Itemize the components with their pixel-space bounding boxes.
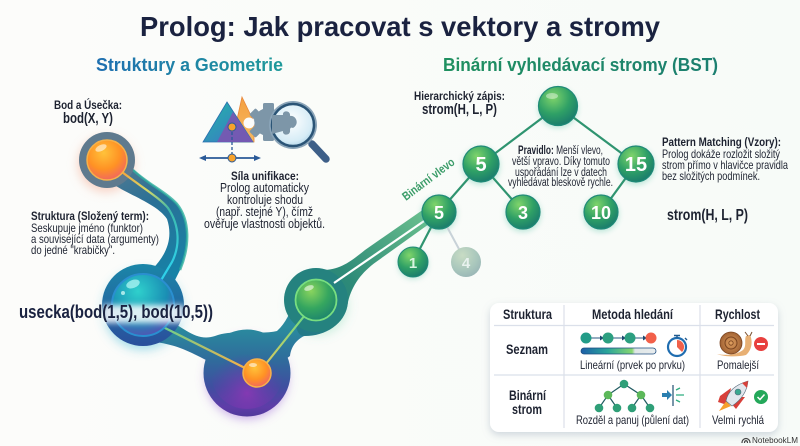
formula: strom(H, L, P): strom(H, L, P) bbox=[667, 207, 748, 224]
icon: green check bbox=[754, 390, 768, 404]
icon: snail bbox=[717, 332, 752, 356]
node: 5: 5 bbox=[475, 154, 487, 176]
node: 3 bbox=[506, 195, 540, 229]
node: 4 faded bbox=[451, 247, 481, 277]
text block: Síla unifikace: Prolog automaticky bbox=[220, 181, 310, 195]
text block: Hierarchický zápis bbox=[414, 89, 505, 118]
band: green arm bbox=[296, 209, 429, 336]
caption: Rozděl a panuj: Rozděl a panuj (půlení dat) bbox=[576, 413, 689, 427]
row label: Binární strom bbox=[509, 387, 547, 417]
inner line: curved link bbox=[122, 172, 178, 282]
sphere: orange lower bbox=[243, 359, 271, 387]
text block: Hierarchický zápis: strom(H, L, P) bbox=[422, 101, 497, 118]
caption: Pomalejší: Pomalejší bbox=[717, 358, 760, 372]
node ring: purple basin bbox=[204, 330, 290, 416]
comparison table bbox=[490, 303, 778, 432]
text block: Struktura bbox=[31, 209, 159, 257]
text block: Pravidlo: větší vpravo. Díky tomuto bbox=[512, 156, 610, 168]
icon: stopwatch bbox=[668, 336, 687, 356]
label: Binární vlevo: Binární vlevo bbox=[399, 155, 457, 203]
text block: Síla unifikace: (např. stejné Y), čímž bbox=[216, 205, 313, 219]
node: 5 bbox=[463, 146, 499, 182]
text block: Pravidlo: Pravidlo: Menší vlevo, bbox=[518, 145, 603, 157]
node ring: top point bbox=[79, 132, 135, 188]
icon: progress bar bbox=[581, 348, 656, 354]
icon: rocket bbox=[718, 381, 748, 411]
icon: linked list chain bbox=[580, 332, 656, 344]
watermark: NotebookLM: NotebookLM bbox=[752, 435, 798, 445]
text block: Pattern Matching: bez složitých podmínek. bbox=[662, 169, 760, 183]
icon: red minus bbox=[754, 337, 768, 351]
node: 10 bbox=[584, 195, 618, 229]
inner line: link to green point bbox=[265, 315, 305, 365]
node glows bbox=[398, 88, 655, 279]
node: 5 lower: 5 bbox=[434, 203, 444, 223]
node ring: green bbox=[284, 268, 348, 332]
node: 5 lower bbox=[422, 195, 456, 229]
text block: Struktura: Struktura (Složený term): bbox=[31, 209, 149, 223]
icon: unification triangles, gear and magnifier bbox=[199, 97, 326, 162]
title: Prolog: Jak pracovat s vektory a stromy bbox=[140, 11, 660, 42]
row label: Binární strom: strom bbox=[512, 401, 542, 417]
axis and dots bbox=[231, 127, 233, 158]
node: 1 bbox=[398, 247, 428, 277]
text block: Pravidlo bbox=[508, 145, 613, 189]
text block: Bod a Úsečka: Bod a Úsečka: bbox=[54, 97, 122, 112]
heading: Struktury a Geometrie: Struktury a Geometrie bbox=[96, 54, 283, 75]
glows bbox=[78, 136, 348, 419]
connected molecule path bbox=[78, 132, 429, 419]
text block: Struktura: a související data (argumenty) bbox=[31, 232, 159, 246]
band: lower connection bbox=[155, 300, 306, 385]
text block: Pravidlo: vyhledávat bleskově rychle. bbox=[508, 177, 613, 189]
row label: Seznam: Seznam bbox=[506, 341, 548, 357]
white halo behind formula bbox=[102, 305, 184, 323]
text block: Struktura: do jedné "krabičky". bbox=[31, 243, 115, 257]
table header: Metoda hledání bbox=[592, 306, 674, 322]
node: 10: 10 bbox=[591, 203, 611, 223]
text block: Síla unifikace: kontroluje shodu bbox=[227, 193, 303, 207]
text block: Bod a Úsečka: bod(X, Y) bbox=[63, 110, 113, 127]
text block: Hierarchický zápis: Hierarchický zápis: bbox=[414, 89, 505, 103]
magnifier bbox=[312, 144, 326, 159]
table header bbox=[503, 306, 760, 322]
band: point to segment bbox=[116, 166, 187, 286]
row label: Binární strom: Binární bbox=[509, 387, 547, 403]
node ring: large bbox=[102, 264, 184, 346]
icon: split arrows bbox=[662, 385, 684, 406]
node: 3: 3 bbox=[518, 203, 528, 223]
icon: mini tree bbox=[595, 380, 654, 412]
text block: Síla unifikace bbox=[204, 169, 325, 231]
inner line: link to orange point bbox=[145, 318, 245, 368]
binary tree bbox=[398, 86, 655, 279]
table header: Rychlost bbox=[715, 306, 760, 322]
formula: usecka: usecka(bod(1,5), bod(10,5)) bbox=[19, 302, 213, 322]
text block: Bod a Úsečka bbox=[54, 97, 122, 127]
node: 4 faded: 4 bbox=[462, 255, 471, 272]
text block: Struktura: Seskupuje jméno (funktor) bbox=[31, 221, 143, 235]
sphere: orange top bbox=[87, 140, 127, 180]
text block: Pravidlo: uspořádání lze v datech bbox=[515, 167, 607, 179]
node: 15 bbox=[618, 146, 654, 182]
triangles bbox=[232, 97, 254, 142]
node: 1: 1 bbox=[409, 255, 417, 272]
gear bbox=[249, 103, 282, 141]
node: root bbox=[538, 86, 578, 126]
caption: Velmi rychlá: Velmi rychlá bbox=[712, 413, 764, 427]
sphere: large cyan bbox=[112, 274, 174, 336]
text block: Síla unifikace: Síla unifikace: bbox=[231, 169, 299, 183]
heading: Binární vyhledávací stromy (BST): Binární vyhledávací stromy (BST) bbox=[443, 54, 718, 75]
text block: Pattern Matching bbox=[662, 135, 788, 183]
caption: Lineární: Lineární (prvek po prvku) bbox=[580, 358, 685, 372]
node: 15: 15 bbox=[625, 154, 647, 176]
table card bbox=[490, 303, 778, 432]
text block: Síla unifikace: ověřuje vlastnosti objektů. bbox=[204, 217, 325, 231]
table header: Struktura bbox=[503, 306, 552, 322]
tree edges bbox=[413, 106, 636, 262]
sphere: green bbox=[296, 280, 336, 320]
